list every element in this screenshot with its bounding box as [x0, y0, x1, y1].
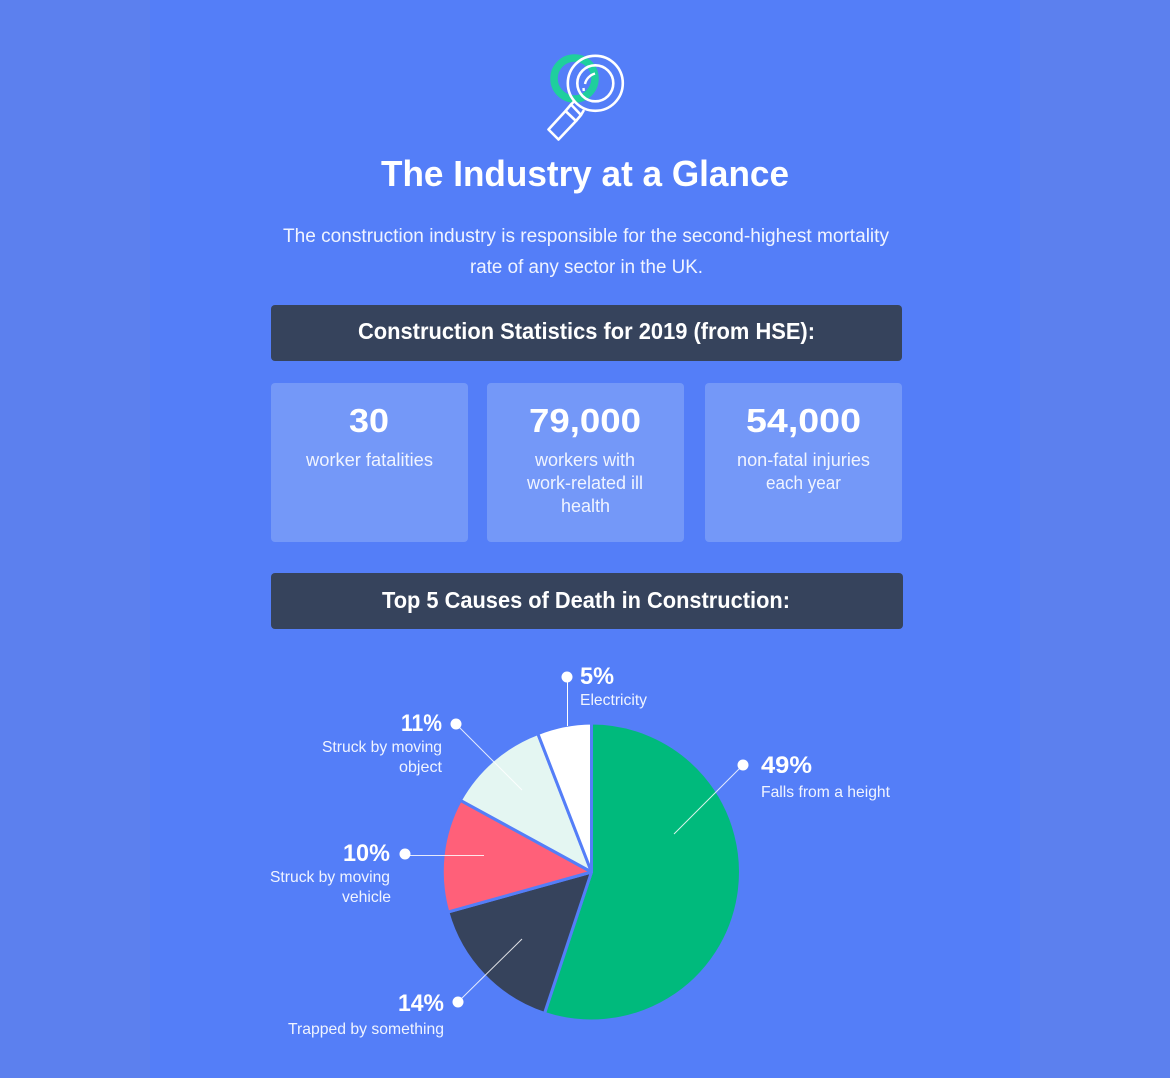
callout: 49% falls from a height: Falls from a height	[761, 784, 891, 801]
callout: 10% struck by moving vehicle: 10%	[343, 840, 390, 867]
pie chart	[442, 723, 740, 1021]
callout: 5% electricity: Electricity	[580, 692, 647, 709]
panel: worker fatalities	[271, 383, 468, 542]
panel: non-fatal injuries	[705, 383, 902, 542]
panel: non-fatal injuries: 54,000	[746, 402, 861, 439]
callout: 10% struck by moving vehicle	[270, 840, 484, 906]
callout: 5% electricity: 5%	[580, 663, 614, 690]
intro text	[283, 226, 889, 278]
icon: magnifying glass	[548, 56, 623, 140]
intro text: rate of any sector in the UK.	[470, 257, 703, 278]
slice: falls from a height	[544, 723, 740, 1021]
callout: 10% struck by moving vehicle: Struck by moving	[270, 869, 390, 886]
callout: 14% trapped by something	[288, 939, 522, 1038]
callout: 11% struck by moving object	[322, 710, 522, 790]
panel: ill health	[487, 383, 684, 542]
panel: worker fatalities: 30	[349, 402, 389, 439]
heading: construction statistics: Construction Statistics for 2019 (from HSE):	[358, 318, 815, 344]
callout: 10% struck by moving vehicle: vehicle	[342, 889, 391, 906]
callout: 5% electricity	[562, 663, 647, 726]
heading: construction statistics	[271, 305, 902, 361]
slice: trapped by something	[448, 872, 592, 1013]
panel: ill health: health	[561, 496, 610, 516]
intro text: The construction industry is responsible for the second-highest mortality	[283, 226, 889, 247]
slice: struck by moving object	[460, 734, 592, 872]
panel: ill health: work-related ill	[526, 473, 643, 493]
callout: 11% struck by moving object: Struck by moving	[322, 739, 442, 756]
callout: 14% trapped by something: Trapped by something	[288, 1021, 444, 1038]
panel: non-fatal injuries: each year	[766, 473, 841, 493]
slice: struck by moving vehicle	[442, 800, 592, 912]
callout: 11% struck by moving object: object	[399, 759, 443, 776]
callout: 49% falls from a height: 49%	[761, 752, 812, 779]
callout: 49% falls from a height	[674, 752, 891, 834]
title: The Industry at a Glance	[381, 153, 789, 194]
slice: electricity	[538, 723, 592, 872]
panel: ill health: workers with	[534, 450, 635, 470]
panel: worker fatalities: worker fatalities	[305, 450, 433, 470]
callout: 14% trapped by something: 14%	[398, 990, 444, 1017]
heading: top 5 causes: Top 5 Causes of Death in Construction:	[382, 587, 790, 613]
callout: 11% struck by moving object: 11%	[401, 710, 442, 737]
panel: non-fatal injuries: non-fatal injuries	[737, 450, 870, 470]
panel: ill health: 79,000	[529, 402, 641, 439]
heading: top 5 causes	[271, 573, 903, 629]
